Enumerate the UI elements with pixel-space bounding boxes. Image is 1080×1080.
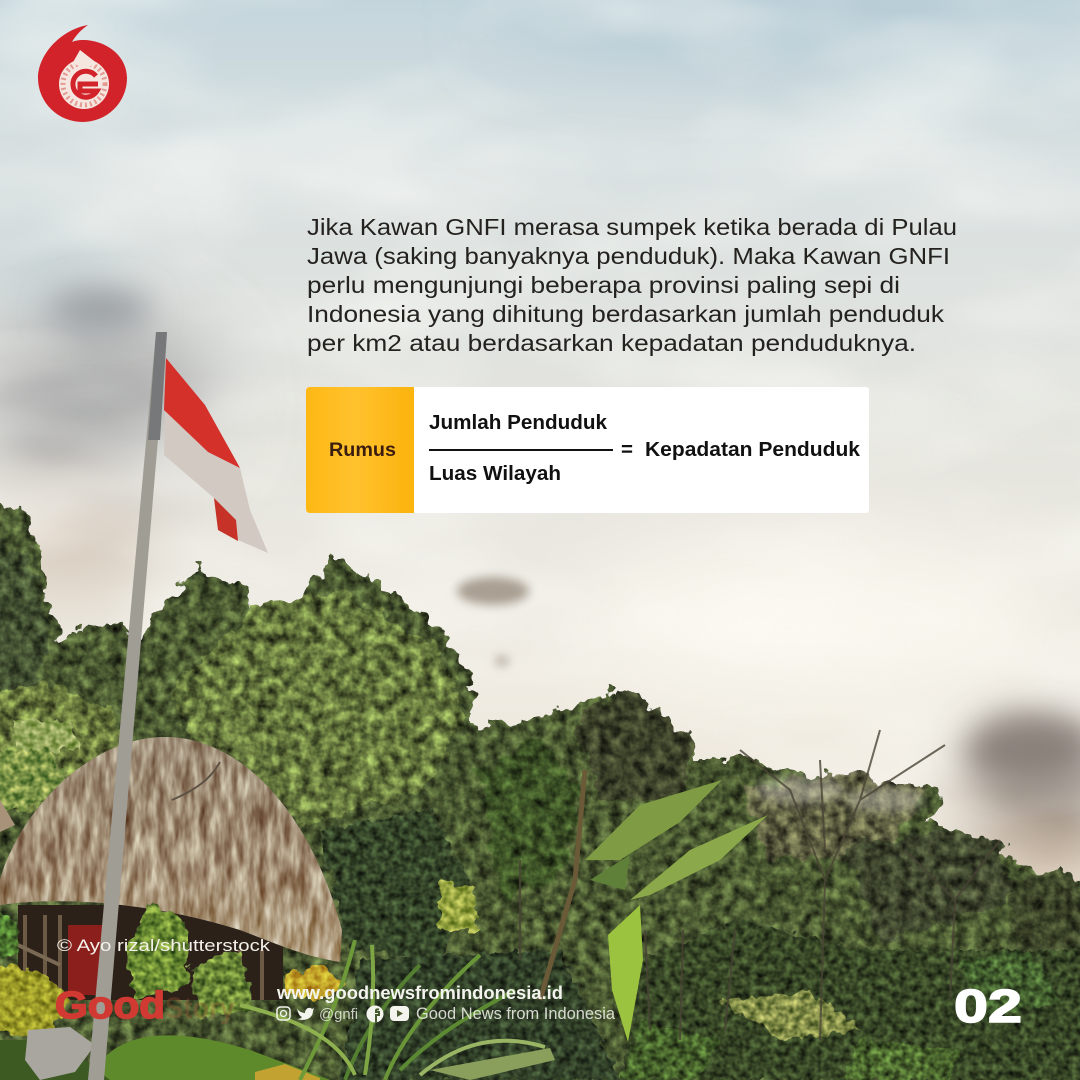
formula fraction and result: Kepadatan Penduduk [645, 438, 861, 461]
footer website and social handles [276, 983, 616, 1023]
formula box [306, 387, 869, 513]
formula fraction and result: Luas Wilayah [429, 462, 561, 485]
formula fraction and result: Jumlah Penduduk [429, 411, 608, 434]
formula fraction and result: = [621, 438, 633, 461]
foreground plants, rock and grass [0, 905, 555, 1080]
intro paragraph: per km2 atau berdasarkan kepadatan penduduknya. [307, 330, 916, 356]
background trees and vegetation [0, 500, 1080, 1080]
sky showing through the bare tree crowns [755, 776, 925, 812]
icon: twitter [297, 1008, 314, 1020]
logo [38, 25, 127, 122]
intro paragraph: Indonesia yang dihitung berdasarkan jumlah penduduk [307, 301, 944, 327]
footer website and social handles: Good News from Indonesia [416, 1005, 616, 1023]
bare tree branches on the right [520, 730, 1000, 1040]
formula label: Rumus [306, 387, 414, 513]
Indonesian flag [164, 358, 268, 553]
page number: 02 [954, 980, 1022, 1032]
thatched hut [0, 737, 342, 1000]
Good Story logo [55, 985, 235, 1027]
icon: youtube [390, 1006, 409, 1021]
formula label: Rumus: Rumus [329, 439, 396, 461]
formula fraction and result [429, 411, 861, 485]
intro paragraph: perlu mengunjungi beberapa provinsi paling sepi di [307, 272, 900, 298]
intro paragraph [307, 214, 957, 356]
footer website and social handles: @gnfi [319, 1006, 358, 1023]
icon: instagram [277, 1007, 290, 1020]
Good Story logo: Story [165, 992, 235, 1025]
banana plant [540, 770, 768, 1042]
intro paragraph: Jika Kawan GNFI merasa sumpek ketika berada di Pulau [307, 214, 957, 240]
flagpole [88, 332, 167, 1080]
photo credit: © Ayo rizal/shutterstock [57, 936, 271, 955]
Good Story logo: Good [55, 985, 165, 1027]
footer website and social handles: www.goodnewsfromindonesia.id [276, 983, 563, 1003]
intro paragraph: Jawa (saking banyaknya penduduk). Maka Kawan GNFI [307, 243, 950, 269]
icon: facebook [366, 1006, 384, 1023]
